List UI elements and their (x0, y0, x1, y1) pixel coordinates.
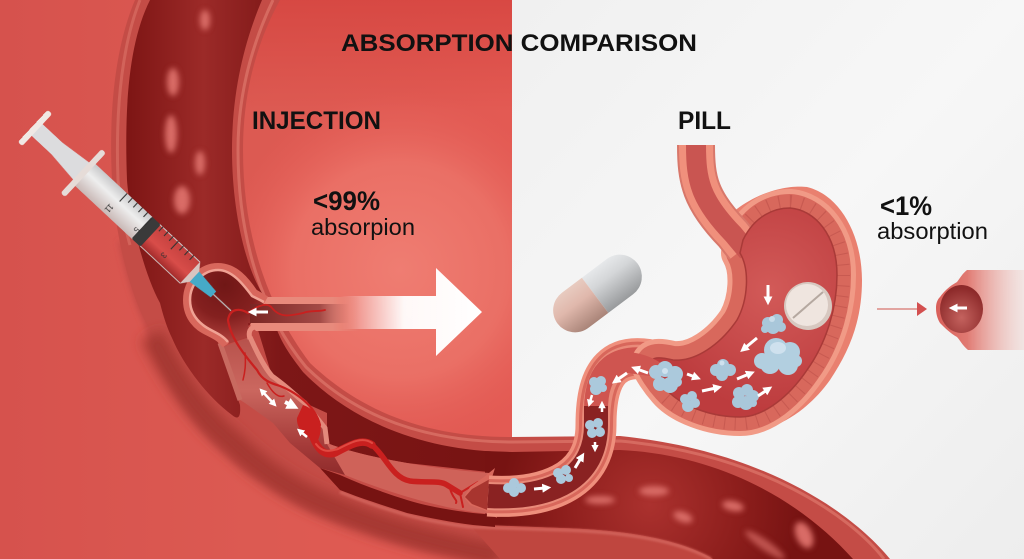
muscle stripes (667, 208, 837, 417)
cell (174, 186, 190, 214)
pouch wall (187, 267, 266, 345)
barrel tip (180, 262, 205, 288)
inner tissue (327, 443, 490, 514)
arrow (737, 374, 749, 379)
lumen lower crescent (320, 468, 495, 527)
plunger flange (18, 110, 52, 146)
scale number: 3 (158, 250, 168, 260)
cell (742, 527, 788, 559)
stopper (132, 217, 161, 247)
fold highlight (340, 492, 711, 559)
lumen upper (126, 0, 512, 472)
squiggle highlight (316, 440, 372, 451)
injection site pouch (187, 267, 360, 345)
arrow (285, 402, 291, 405)
cloud centre (710, 359, 736, 381)
side branch (248, 305, 325, 315)
branch lower wall corner (249, 327, 270, 339)
outer wall highlight (117, 0, 140, 245)
cloud lower left (680, 391, 700, 412)
cell (585, 496, 615, 504)
vessel wall (111, 0, 890, 559)
capsule pink half (544, 278, 608, 341)
pylorus connection (620, 352, 665, 376)
small white arrow (955, 306, 967, 310)
scale number: 11 (102, 202, 115, 214)
cloud lower right (732, 384, 759, 410)
arrow head (917, 302, 927, 316)
tablet score (793, 292, 823, 318)
scale number: 5 (131, 225, 141, 235)
lower fold (484, 540, 501, 558)
cloud medium left (649, 361, 683, 393)
capsule white half (582, 246, 651, 313)
needle (200, 281, 231, 311)
stomach muscle band (650, 208, 837, 417)
arrow (687, 374, 695, 377)
stat: pill value: <1% (880, 191, 932, 221)
tube lumen rosy (596, 359, 660, 410)
tube flared cut end (464, 468, 497, 518)
arrow (702, 388, 716, 391)
arrow (745, 338, 757, 348)
cloud tube upper (585, 418, 605, 438)
outer wall dark shading (152, 335, 500, 556)
small intestine tube (464, 359, 660, 518)
arrow (758, 390, 767, 396)
arrow (601, 406, 603, 412)
stat: injection value: <99% (313, 186, 380, 216)
small vessel cross-section (936, 270, 1024, 350)
title: ABSORPTION COMPARISON (341, 30, 697, 57)
cell (167, 68, 179, 96)
arrow (594, 442, 596, 447)
inner channel (223, 337, 345, 475)
cell (791, 519, 817, 551)
stomach inner band (650, 208, 837, 417)
cell (200, 10, 210, 30)
small branch (243, 353, 284, 396)
plunger rod (28, 121, 91, 182)
cell (195, 151, 205, 175)
tube lumen dark (488, 406, 596, 496)
barrel flange (61, 149, 106, 197)
main branch (228, 310, 320, 425)
large white arrow (340, 268, 482, 356)
stomach outer wall (638, 187, 862, 433)
artery network (228, 305, 478, 507)
tube muscle (488, 359, 660, 496)
arrow (575, 458, 581, 468)
vessel body (936, 270, 1024, 350)
squiggle forks (450, 482, 478, 507)
arrow (301, 432, 307, 437)
thick squiggle end (372, 445, 460, 493)
branch tube wall (250, 297, 360, 331)
stat: injection label: absorpion (311, 214, 415, 240)
tablet body (784, 282, 832, 330)
tablet (784, 282, 832, 330)
arrow (766, 285, 770, 299)
channel wall right (250, 337, 327, 444)
capsule pill (544, 246, 651, 341)
arrow (617, 373, 627, 380)
arrow (261, 390, 275, 405)
pouch interior (190, 270, 264, 344)
tube inner rim (488, 359, 660, 496)
thick squiggle start (313, 437, 372, 454)
cell (672, 509, 694, 525)
vessel opening (940, 285, 983, 333)
lumen right section (485, 450, 853, 559)
blood cells (165, 10, 817, 559)
cloud duodenum (589, 376, 607, 395)
cloud tube end (503, 478, 526, 497)
background: pill side (512, 0, 1024, 559)
ragged end (465, 479, 490, 511)
tablet face (786, 284, 828, 326)
red arrow to small vessel (877, 302, 927, 316)
channel wall left (220, 343, 240, 400)
syringe (12, 104, 251, 333)
stomach lumen (650, 208, 837, 417)
vessel wall highlight (238, 0, 884, 559)
blood in barrel (139, 223, 200, 283)
scale ticks (120, 193, 194, 264)
soft lower edge (118, 243, 338, 522)
blood vessel (111, 0, 890, 559)
blob (297, 405, 321, 440)
heading: pill: PILL (678, 107, 731, 135)
cell (165, 115, 177, 153)
cell (721, 499, 745, 513)
arrow (637, 369, 648, 373)
stomach (620, 145, 862, 433)
tube outer wall (488, 359, 660, 496)
heading: injection: INJECTION (252, 107, 381, 135)
esophagus inner (696, 145, 748, 252)
cloud large (754, 338, 802, 375)
esophagus pale band (696, 145, 744, 248)
branch tube lumen (250, 304, 350, 323)
pouch pale rim (190, 270, 264, 342)
stat: pill label: absorption (877, 218, 988, 244)
cloud tube middle (553, 465, 573, 484)
background: injection side (0, 0, 512, 559)
esophagus edge (696, 145, 744, 248)
arrow (590, 395, 592, 402)
arrow (254, 310, 268, 314)
white process arrows (254, 285, 768, 489)
arrow (534, 488, 545, 489)
cloud small upper (761, 314, 786, 334)
barrel (73, 162, 200, 284)
needle hub (184, 266, 218, 300)
drug particle clouds (503, 314, 802, 497)
cell (639, 486, 669, 496)
arrow shaft (877, 308, 918, 310)
